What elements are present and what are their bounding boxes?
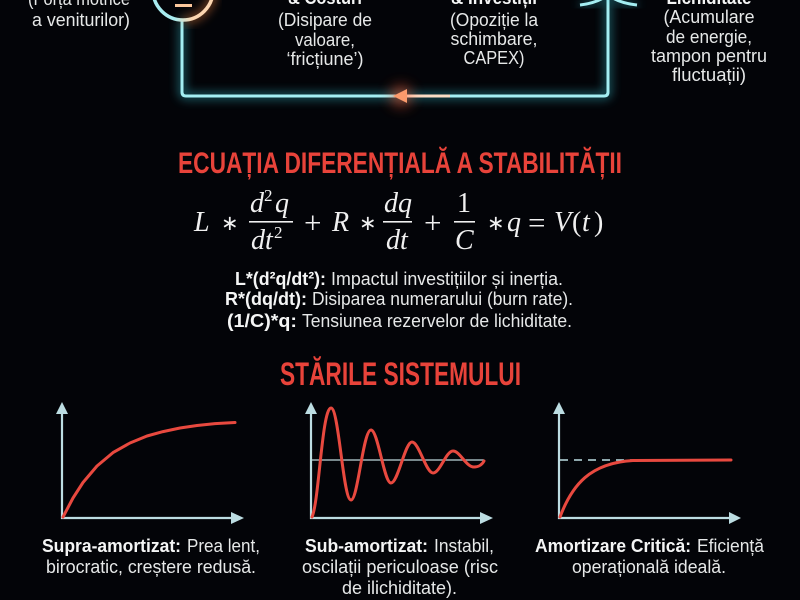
equation: 2 <box>274 223 282 242</box>
caption: critically damped: Amortizare Critică: <box>535 535 691 556</box>
equation legend: R*(dq/dt): <box>225 288 307 309</box>
equation: dq <box>384 188 412 219</box>
equation: d <box>250 188 265 219</box>
label: liquidity: fluctuații) <box>672 64 746 85</box>
label: liquidity: tampon pentru <box>651 45 767 66</box>
equation: t <box>582 207 591 238</box>
label: liquidity: de energie, <box>666 26 752 47</box>
equation: ( <box>572 207 581 238</box>
equation: ) <box>594 207 603 238</box>
caption: overdamped: Prea lent, <box>187 535 260 556</box>
circuit diagram <box>153 0 637 106</box>
equation: + <box>424 205 441 240</box>
label: costs <box>278 0 372 69</box>
equation: 1 <box>457 188 471 219</box>
label: liquidity: (Acumulare <box>664 6 754 27</box>
equation: ∗ <box>221 211 239 235</box>
heading: differential equation: ECUAȚIA DIFERENȚIALĂ A STABILITĂȚII <box>178 146 622 180</box>
label: investments: CAPEX) <box>464 47 524 68</box>
equation legend: (1/C)*q: <box>227 310 297 331</box>
equation: q <box>507 207 521 238</box>
icon: current arrow <box>391 86 411 106</box>
equation legend: Disiparea numerarului (burn rate). <box>312 288 573 309</box>
equation <box>193 186 603 256</box>
caption: underdamped: Instabil, <box>434 535 494 556</box>
label: costs: valoare, <box>295 29 355 50</box>
caption: critically damped: operațională ideală. <box>572 556 726 577</box>
icon: capacitor plate <box>580 0 637 5</box>
label: costs: (Disipare de <box>278 9 372 30</box>
equation legend <box>225 268 573 331</box>
caption: underdamped: Sub-amortizat: <box>305 535 428 556</box>
chart: critically damped <box>553 402 741 524</box>
heading: system states: STĂRILE SISTEMULUI <box>280 356 521 392</box>
circuit wire <box>182 0 608 96</box>
caption: underdamped: oscilații periculoase (risc <box>302 556 498 577</box>
caption: underdamped: de ilichiditate). <box>342 577 457 598</box>
caption: critically damped: Eficiență <box>697 535 765 556</box>
equation: dt <box>251 225 274 256</box>
equation: C <box>455 225 474 256</box>
caption: overdamped <box>42 535 260 577</box>
caption: underdamped <box>302 535 498 598</box>
label: costs: ‘fricțiune’) <box>286 48 364 69</box>
icon: voltage source <box>153 0 213 20</box>
chart: overdamped <box>56 402 244 524</box>
equation: L <box>193 207 210 238</box>
equation: ∗ <box>359 211 377 235</box>
label: voltage source <box>28 0 130 30</box>
equation: R <box>331 207 349 238</box>
equation legend: Impactul investițiilor și inerția. <box>331 268 563 289</box>
label: investments: schimbare, <box>450 28 538 49</box>
caption: critically damped <box>535 535 765 577</box>
caption: overdamped: Supra-amortizat: <box>42 535 181 556</box>
equation: q <box>275 188 289 219</box>
label: voltage source: a veniturilor) <box>32 9 130 30</box>
label: investments: (Opoziție la <box>450 9 539 30</box>
equation legend: L*(d²q/dt²): <box>235 268 326 289</box>
caption: overdamped: birocratic, creștere redusă. <box>46 556 256 577</box>
label: investments <box>450 0 539 68</box>
equation: V <box>554 207 574 238</box>
equation legend: Tensiunea rezervelor de lichiditate. <box>302 310 572 331</box>
equation: ∗ <box>487 211 505 235</box>
equation: dt <box>386 225 409 256</box>
equation: + <box>304 205 321 240</box>
equation: 2 <box>264 186 272 205</box>
chart: underdamped <box>305 402 493 524</box>
label: liquidity <box>651 0 767 85</box>
equation: = <box>528 205 545 240</box>
